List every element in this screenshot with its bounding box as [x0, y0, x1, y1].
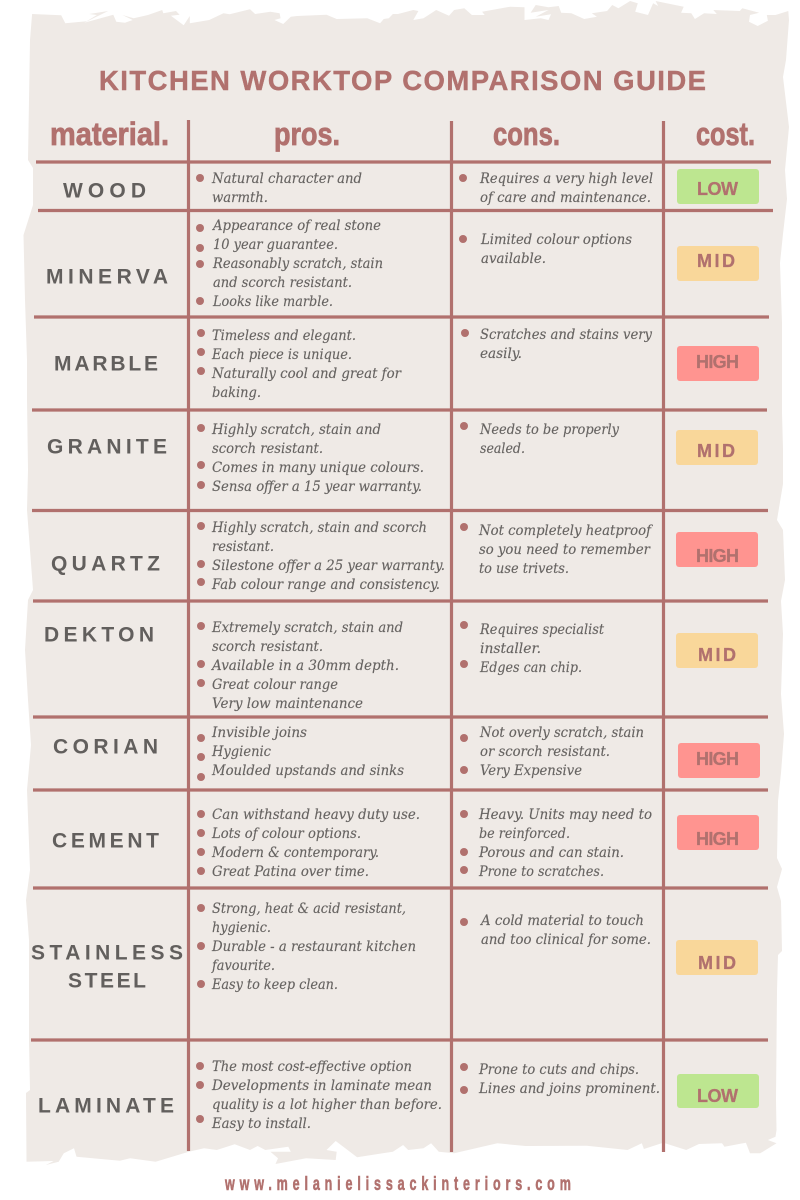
- row: minerva: Limited colour options: [480, 232, 632, 248]
- row: quartz: Not completely heatproof: [478, 523, 654, 539]
- row: cement: Prone to scratches.: [478, 864, 604, 880]
- row: laminate: The most cost-effective option: [212, 1059, 412, 1075]
- row: granite: Highly scratch, stain and: [211, 422, 381, 438]
- row: laminate: Easy to install.: [211, 1116, 311, 1132]
- row: laminate: LAMINATE: [38, 1094, 174, 1118]
- row: laminate: Prone to cuts and chips.: [478, 1062, 639, 1078]
- row: stainless steel: and too clinical for some.: [481, 932, 651, 948]
- row: minerva: 10 year guarantee.: [213, 237, 338, 253]
- row: cement: Porous and can stain.: [478, 845, 624, 861]
- row: stainless steel: Durable - a restaurant kitchen: [211, 939, 416, 955]
- row: corian: Very Expensive: [480, 763, 582, 779]
- row: quartz: Silestone offer a 25 year warranty.: [212, 558, 445, 574]
- column headings: material.: [50, 116, 169, 152]
- row: dekton: MID: [698, 645, 736, 665]
- footer website: www.melanielissackinteriors.com: [224, 1173, 571, 1195]
- row: cement: [52, 807, 759, 880]
- row: minerva: MID: [697, 251, 735, 271]
- row: quartz: [51, 520, 758, 593]
- column headings: [50, 116, 755, 152]
- row: minerva: MINERVA: [46, 266, 168, 288]
- row: dekton: Extremely scratch, stain and: [211, 620, 403, 636]
- row: granite: scorch resistant.: [212, 441, 323, 457]
- row: corian: CORIAN: [53, 736, 158, 758]
- row: marble: Scratches and stains very: [480, 327, 653, 343]
- row: cement: Lots of colour options.: [211, 826, 361, 842]
- row: minerva: [46, 218, 759, 310]
- row: laminate: [38, 1059, 759, 1132]
- row: corian: Moulded upstands and sinks: [211, 763, 404, 779]
- row: wood: WOOD: [63, 180, 146, 202]
- row: wood: Natural character and: [211, 171, 362, 187]
- row: minerva: Reasonably scratch, stain: [212, 256, 383, 272]
- row: cement: HIGH: [696, 829, 739, 849]
- row: quartz: QUARTZ: [51, 552, 160, 576]
- row: minerva: Looks like marble.: [212, 294, 333, 310]
- row: granite: Needs to be properly: [479, 422, 620, 438]
- row: granite: [47, 422, 758, 495]
- row: wood: Requires a very high level: [479, 171, 653, 187]
- row: marble: [54, 327, 759, 401]
- row: wood: [63, 169, 759, 206]
- row: granite: GRANITE: [47, 436, 167, 458]
- row: stainless steel: STAINLESS: [31, 942, 183, 964]
- row: stainless steel: favourite.: [211, 958, 275, 974]
- row: corian: Hygienic: [211, 744, 271, 760]
- row: dekton: Very low maintenance: [212, 696, 363, 712]
- row: laminate: quality is a lot higher than before.: [212, 1097, 442, 1113]
- title: KITCHEN WORKTOP COMPARISON GUIDE: [99, 65, 706, 96]
- row: granite: MID: [697, 441, 735, 461]
- row: cement: Heavy. Units may need to: [478, 807, 652, 823]
- row: granite: Sensa offer a 15 year warranty.: [212, 479, 422, 495]
- row: minerva: Appearance of real stone: [211, 218, 381, 234]
- row: cement: Modern & contemporary.: [211, 845, 379, 861]
- row: dekton: [44, 620, 758, 712]
- row: cement: be reinforced.: [479, 826, 570, 842]
- row: corian: or scorch resistant.: [480, 744, 610, 760]
- row: marble: MARBLE: [54, 352, 158, 376]
- column headings: cost.: [696, 116, 755, 152]
- row: stainless steel: MID: [698, 953, 736, 973]
- row: marble: Naturally cool and great for: [211, 366, 402, 382]
- row: stainless steel: hygienic.: [212, 920, 271, 936]
- row: stainless steel: Strong, heat & acid resistant,: [212, 901, 406, 917]
- row: dekton: DEKTON: [44, 624, 154, 646]
- row: quartz: HIGH: [696, 546, 739, 566]
- row: quartz: Highly scratch, stain and scorch: [211, 520, 427, 536]
- row: wood: LOW: [697, 179, 738, 199]
- row: laminate: Developments in laminate mean: [211, 1078, 432, 1094]
- row: laminate: LOW: [697, 1086, 738, 1106]
- row: cement: CEMENT: [52, 830, 159, 852]
- row: laminate: Lines and joins prominent.: [478, 1081, 660, 1097]
- row: stainless steel: Easy to keep clean.: [211, 977, 338, 993]
- row: quartz: so you need to remember: [479, 542, 651, 558]
- row: granite: Comes in many unique colours.: [212, 460, 424, 476]
- row: cement: Great Patina over time.: [212, 864, 369, 880]
- row: wood: warmth.: [212, 190, 268, 206]
- row: dekton: Great colour range: [212, 677, 338, 693]
- row: marble: Each piece is unique.: [211, 347, 352, 363]
- table grid lines: [31, 120, 773, 1152]
- row: quartz: to use trivets.: [479, 561, 569, 577]
- row: dekton: installer.: [480, 641, 541, 657]
- row: wood: of care and maintenance.: [480, 190, 651, 206]
- row: corian: [53, 725, 760, 781]
- row: marble: Timeless and elegant.: [212, 328, 356, 344]
- row: quartz: resistant.: [212, 539, 274, 555]
- row: dekton: scorch resistant.: [212, 639, 323, 655]
- row: quartz: Fab colour range and consistency.: [211, 577, 440, 593]
- row: dekton: Requires specialist: [479, 622, 604, 638]
- row: marble: easily.: [480, 346, 522, 362]
- row: minerva: and scorch resistant.: [213, 275, 352, 291]
- row: marble: baking.: [212, 385, 261, 401]
- row: stainless steel: [31, 901, 758, 993]
- column headings: pros.: [274, 116, 340, 152]
- row: corian: Not overly scratch, stain: [479, 725, 644, 741]
- row: corian: HIGH: [696, 749, 739, 769]
- row: stainless steel: A cold material to touch: [479, 913, 644, 929]
- row: stainless steel: STEEL: [68, 970, 146, 992]
- row: dekton: Available in a 30mm depth.: [210, 658, 399, 674]
- row: marble: HIGH: [696, 352, 739, 372]
- row: granite: sealed.: [480, 441, 525, 457]
- row: minerva: available.: [481, 251, 546, 267]
- row: cement: Can withstand heavy duty use.: [212, 807, 420, 823]
- row: dekton: Edges can chip.: [479, 660, 582, 676]
- row: corian: Invisible joins: [211, 725, 307, 741]
- column headings: cons.: [493, 116, 560, 152]
